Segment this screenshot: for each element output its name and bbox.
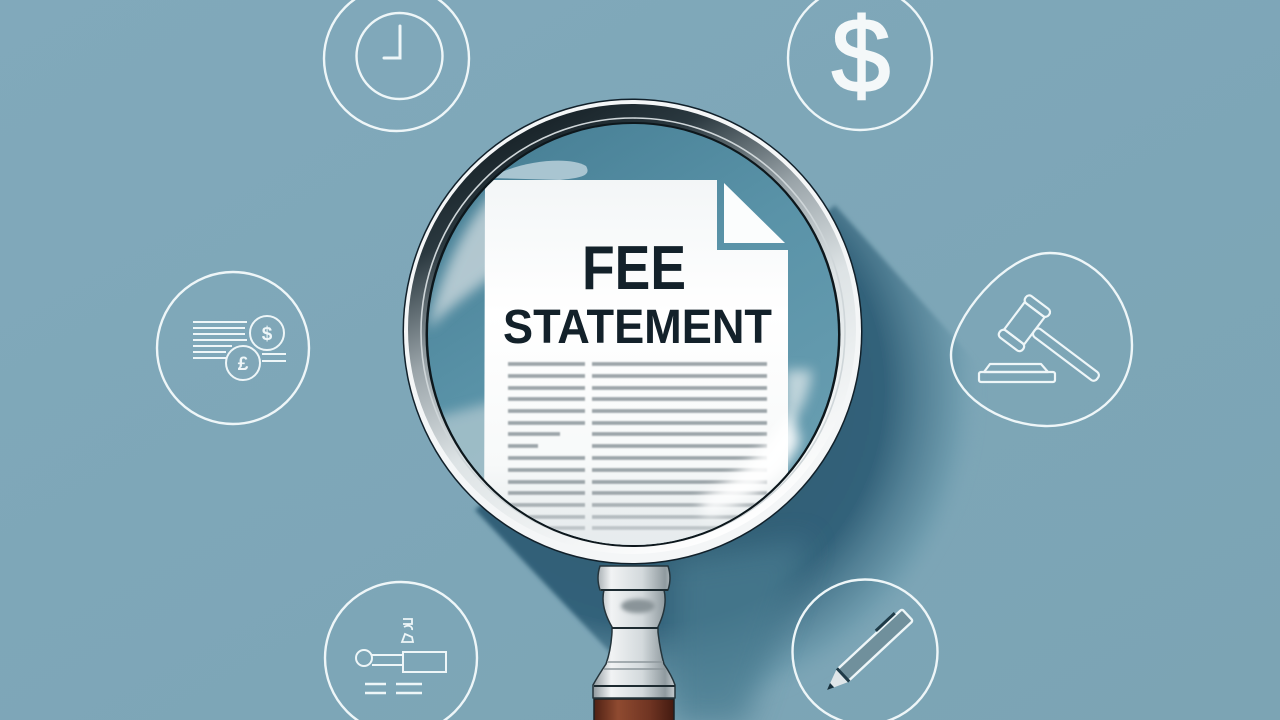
icon: dollar sign [788, 0, 932, 130]
icon: chart with key [325, 582, 477, 720]
glass [428, 124, 838, 545]
glare across lines [700, 410, 800, 520]
glass contents [425, 161, 812, 560]
metal rim [402, 98, 862, 564]
right lens light [785, 370, 812, 430]
wooden grip [594, 699, 674, 720]
lower-left lens light [442, 398, 502, 496]
icon: statement lines with coins [157, 272, 309, 424]
icon: pen [792, 580, 938, 720]
icon: gavel [951, 253, 1132, 426]
heading STATEMENT: STATEMENT [503, 301, 772, 354]
infographic: fee statement under a magnifying glass [156, 0, 1134, 720]
shadow right of the handle [672, 540, 810, 720]
icon: clock [324, 0, 469, 131]
left lens light [428, 190, 485, 330]
long shadow of magnifying glass [475, 205, 1010, 720]
icon: dollar sign: $ [832, 0, 890, 115]
document text lines [508, 364, 767, 528]
glare top-left [490, 161, 588, 180]
heading FEE: FEE [582, 234, 686, 303]
magnifying glass lens [402, 98, 862, 564]
haze at bottom of page [512, 504, 754, 545]
magnifying glass handle [593, 566, 675, 720]
icon: statement lines with coins: $ [262, 324, 273, 345]
icon: statement lines with coins: £ [238, 354, 249, 375]
metal collar [593, 566, 675, 698]
document page [484, 180, 788, 560]
document corner fold [724, 183, 785, 243]
